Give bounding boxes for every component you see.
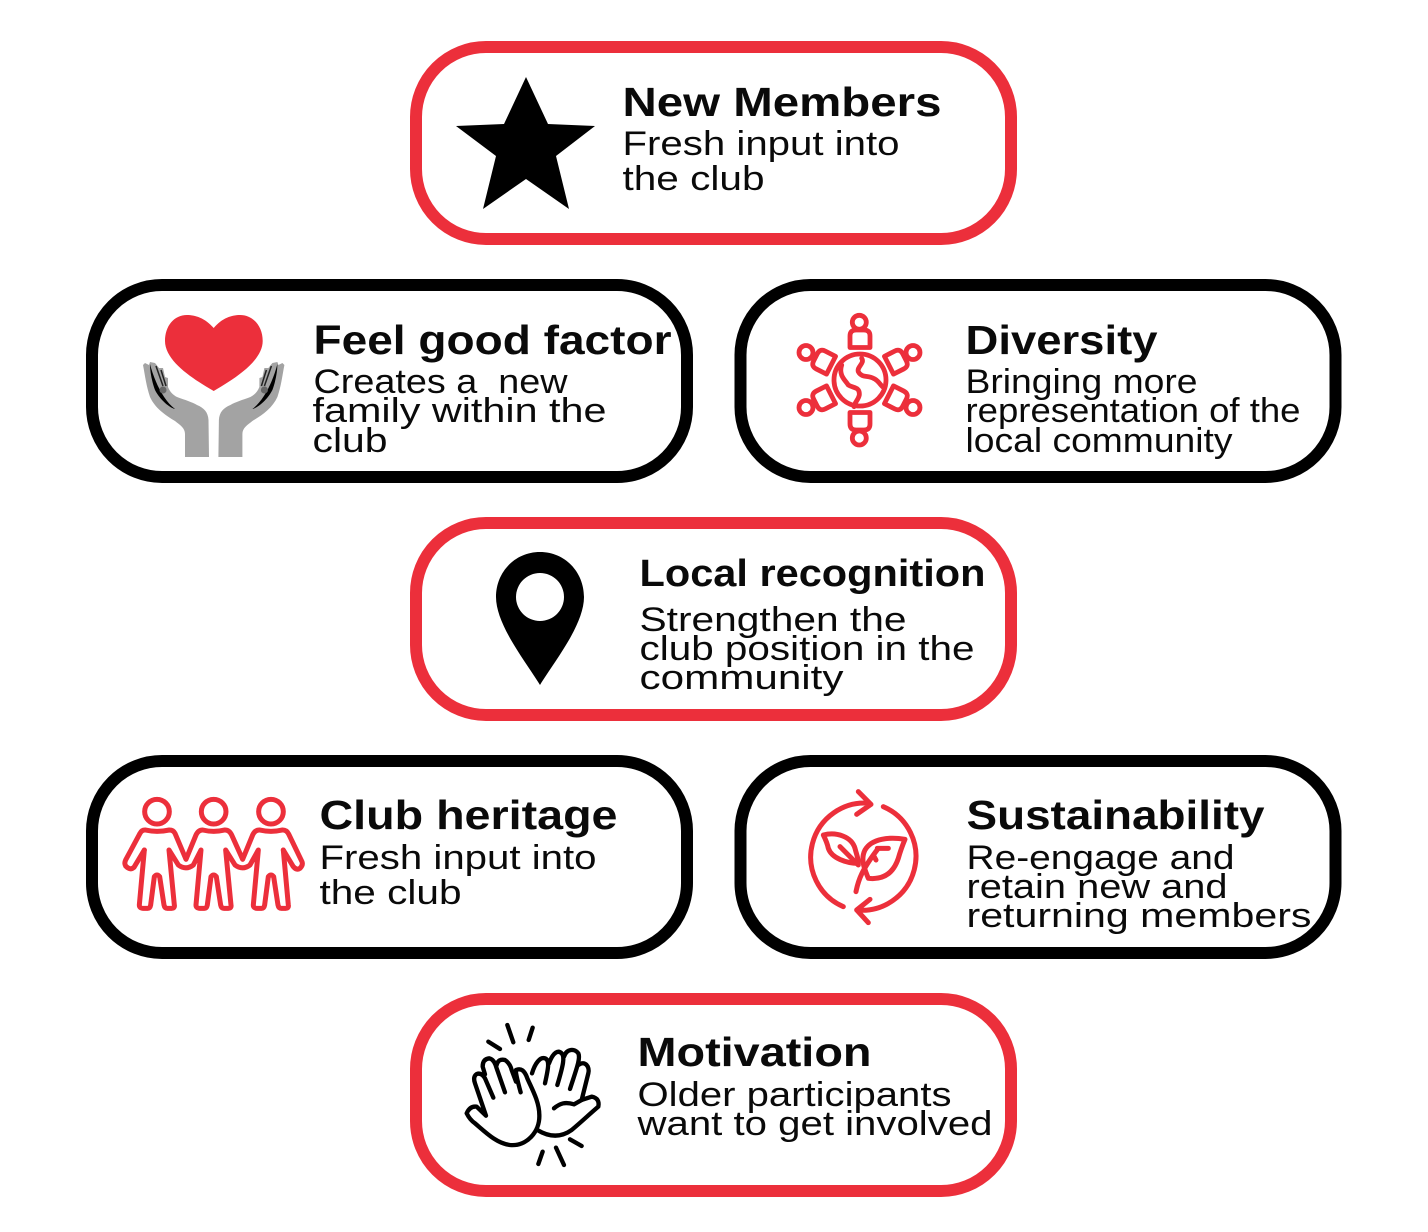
text: Diversity description: local community bbox=[966, 422, 1232, 460]
icon: leaf in recycling arrows bbox=[811, 792, 916, 923]
text: Motivation description: Older participants bbox=[638, 1076, 952, 1114]
text: Sustainability description: returning members bbox=[966, 897, 1312, 935]
panel: Feel good factor bbox=[92, 285, 687, 477]
icon: heart in hands bbox=[143, 315, 284, 457]
text: Diversity description: representation of the bbox=[966, 392, 1300, 430]
icon: people around globe bbox=[799, 315, 920, 445]
text: Diversity description: Bringing more bbox=[966, 363, 1198, 401]
text: Local recognition description bbox=[640, 601, 974, 697]
text: Club heritage description bbox=[320, 839, 596, 912]
heading: New Members: New Members bbox=[622, 79, 942, 125]
text: Local recognition description: club position in the bbox=[640, 630, 974, 668]
text: Diversity description bbox=[966, 363, 1300, 460]
heading: Feel good factor: Feel good factor bbox=[314, 317, 672, 363]
panel: Sustainability bbox=[740, 761, 1336, 953]
text: Club heritage description: Fresh input into bbox=[320, 839, 596, 877]
text: Feel good factor description: family within the bbox=[312, 392, 606, 430]
panel: New Members bbox=[416, 47, 1011, 239]
text: Local recognition description: Strengthen the bbox=[640, 601, 906, 639]
icon: star bbox=[456, 77, 595, 209]
text: New Members description bbox=[622, 125, 900, 198]
text: Club heritage description: the club bbox=[320, 874, 462, 912]
heading: Sustainability: Sustainability bbox=[966, 792, 1265, 838]
icon: high five bbox=[467, 1025, 599, 1165]
panel: Club heritage bbox=[92, 761, 687, 953]
text: Local recognition description: community bbox=[640, 659, 844, 697]
heading: Club heritage: Club heritage bbox=[320, 792, 618, 838]
panel: Local recognition bbox=[416, 523, 1011, 715]
text: Motivation description bbox=[636, 1076, 992, 1143]
panel: Diversity bbox=[740, 285, 1336, 477]
text: Sustainability description bbox=[966, 839, 1312, 935]
text: Motivation description: want to get involved bbox=[636, 1105, 992, 1143]
heading: Diversity: Diversity bbox=[966, 317, 1158, 363]
text: New Members description: the club bbox=[622, 160, 764, 198]
text: Feel good factor description: club bbox=[312, 422, 388, 460]
panel: Motivation bbox=[416, 999, 1011, 1191]
text: Feel good factor description bbox=[312, 363, 606, 460]
icon: map pin bbox=[496, 552, 584, 685]
icon: three people holding hands bbox=[125, 799, 302, 908]
text: Sustainability description: retain new and bbox=[966, 868, 1228, 906]
text: Sustainability description: Re-engage and bbox=[966, 839, 1234, 877]
heading: Local recognition: Local recognition bbox=[640, 553, 986, 595]
text: New Members description: Fresh input into bbox=[622, 125, 900, 163]
text: Feel good factor description: Creates a new bbox=[314, 363, 568, 401]
heading: Motivation: Motivation bbox=[638, 1029, 872, 1075]
